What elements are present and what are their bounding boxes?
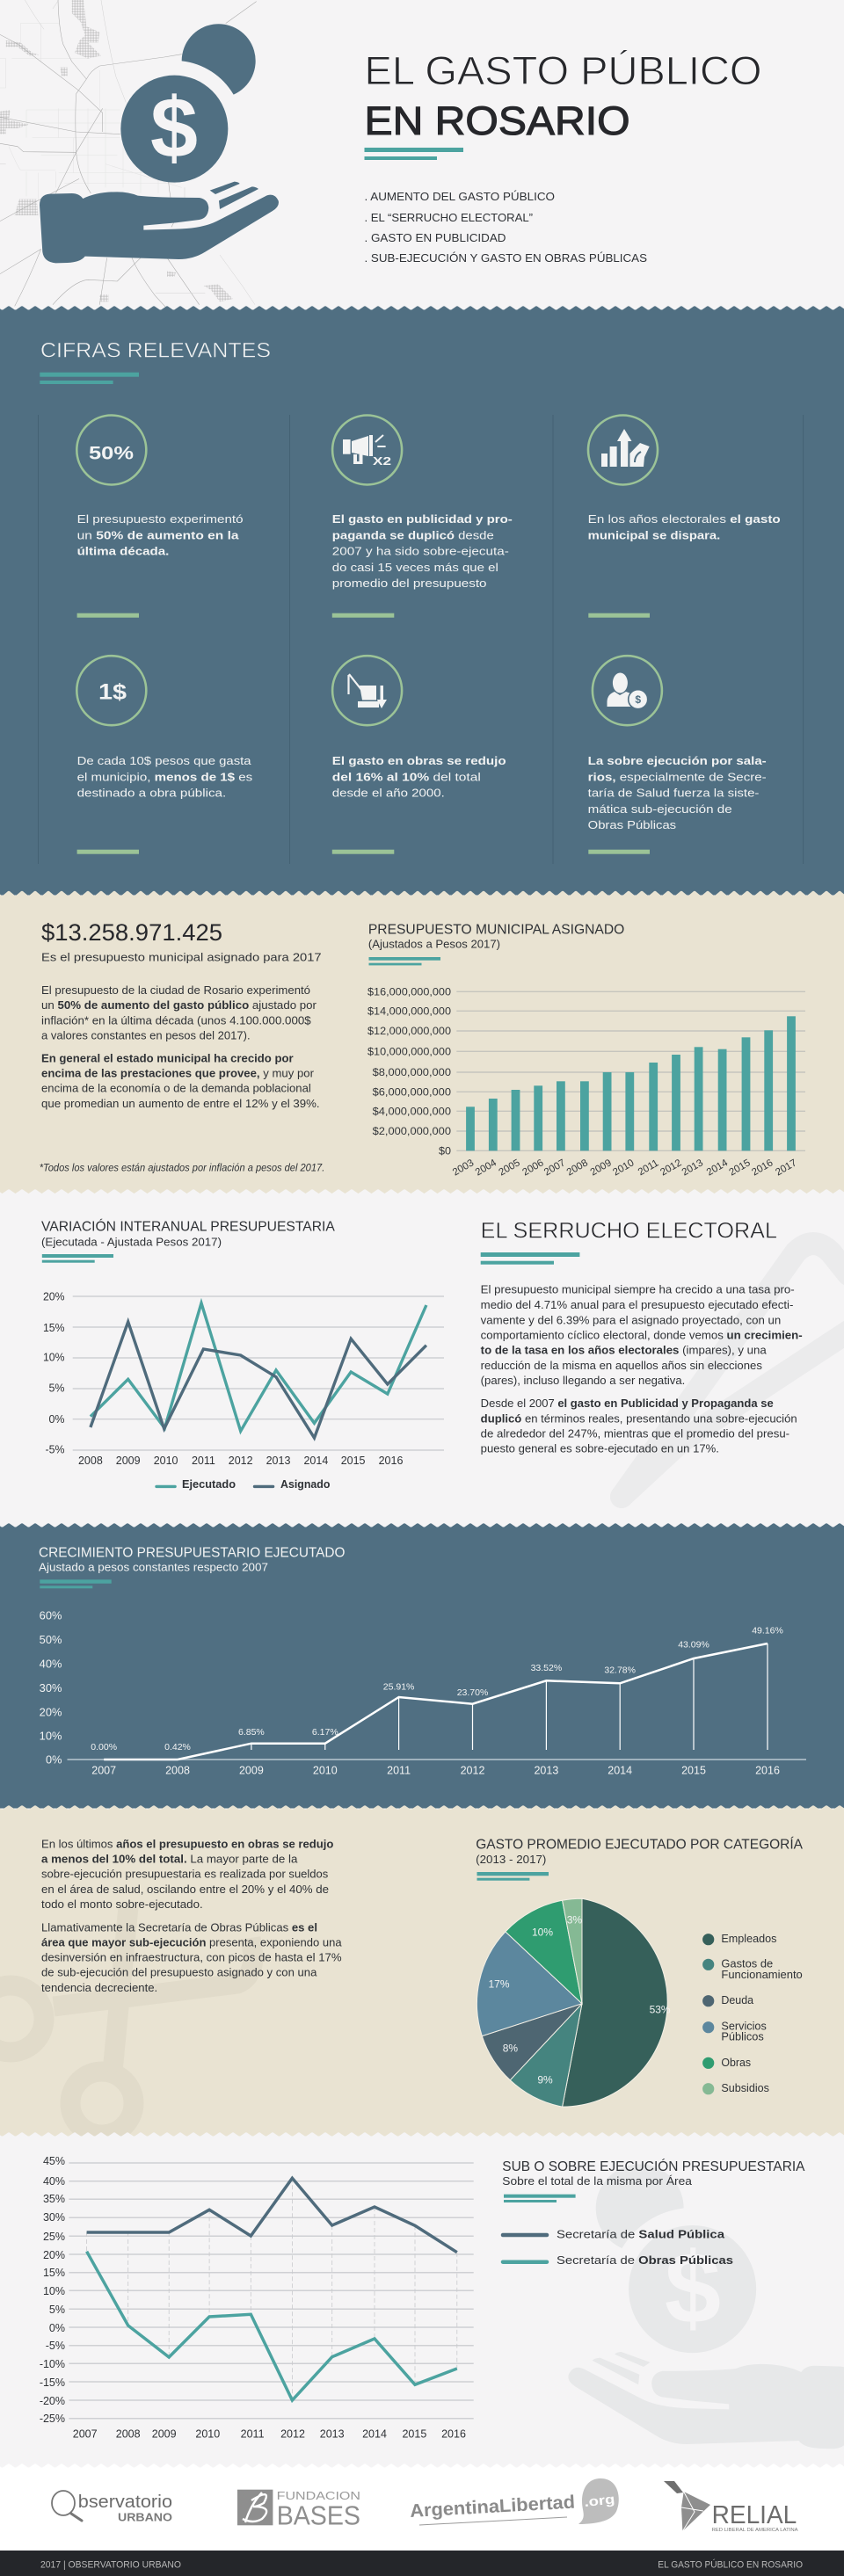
card: public works [332, 656, 506, 854]
big number caption: Es el presupuesto municipal asignado para 2017 [41, 950, 322, 963]
line chart: sub o sobre ejecución: 2013 [320, 2427, 345, 2440]
bar chart: presupuesto municipal: 2007 [542, 1157, 567, 1178]
line chart: sub o sobre ejecución: 20% [43, 2249, 65, 2261]
legend: gasto por categoría [702, 1933, 803, 2094]
icon: dollar sign: $ [150, 80, 198, 176]
line chart: crecimiento: 2007 [91, 1764, 116, 1776]
watermark: scissors [622, 1244, 844, 1497]
text block: obras: en el área de salud, oscilando entre el 20% y el 40% de [41, 1883, 329, 1896]
line chart: sub o sobre ejecución: 2008 [116, 2427, 141, 2440]
line chart: crecimiento: 33.52% [531, 1663, 562, 1673]
section: presupuesto asignado background [0, 896, 844, 1194]
bar chart: presupuesto municipal: 2016 [750, 1157, 775, 1178]
bar chart: presupuesto municipal: 2013 [680, 1157, 705, 1178]
text block: serrucho electoral: vamente y del 6.39% para el asignado proyectado, con un [481, 1313, 781, 1326]
line chart: variación interanual: -5% [46, 1443, 65, 1455]
topics list: . EL “SERRUCHO ELECTORAL” [364, 212, 533, 224]
card: public works: desde el año 2000. [332, 787, 445, 800]
line chart: crecimiento: 30% [40, 1682, 62, 1694]
watermark: scissors handles [0, 1907, 253, 2135]
watermark: hand with coin: $ [665, 2232, 721, 2345]
bar chart: presupuesto municipal: $10,000,000,000 [367, 1048, 451, 1058]
bar chart: presupuesto municipal: 2008 [565, 1157, 590, 1178]
bar chart: presupuesto municipal: $2,000,000,000 [373, 1127, 451, 1137]
title [364, 48, 761, 143]
text block: serrucho electoral: reducción de la misma en aquellos años sin elecciones [481, 1359, 762, 1372]
card: electoral years [588, 415, 781, 618]
logo: argentina libertad [410, 2478, 619, 2525]
line chart: variación interanual: 2013 [266, 1455, 290, 1467]
text block: obras [41, 1837, 342, 1994]
line chart: variación interanual: 15% [43, 1322, 65, 1334]
budget text block: encima de las prestaciones que provee, y muy por [41, 1067, 315, 1080]
city map background [0, 0, 257, 307]
card: salaries: taría de Salud fuerza la siste- [588, 787, 759, 800]
line chart: crecimiento: 10% [40, 1730, 62, 1742]
card: salaries: rios, especialmente de Secre- [588, 770, 767, 783]
bar chart: presupuesto municipal: 2011 [637, 1157, 660, 1178]
line chart: sub o sobre ejecución: -10% [40, 2358, 65, 2370]
card: one dollar: 1$ [98, 680, 127, 705]
card: 50 percent: El presupuesto experimentó [77, 512, 244, 526]
line chart: sub o sobre ejecución: 30% [43, 2211, 65, 2224]
card: publicity doubled: 2007 y ha sido sobre-ejecuta- [332, 545, 509, 558]
chart heading: sub o sobre ejecución: SUB O SOBRE EJECUCIÓN PRESUPUESTARIA [502, 2159, 805, 2174]
text block: obras: a menos del 10% del total. La mayor parte de la [41, 1853, 298, 1866]
line chart: sub o sobre ejecución: 0% [49, 2322, 65, 2334]
chart heading: sub o sobre ejecución [502, 2159, 805, 2202]
card: publicity doubled: paganda se duplicó desde [332, 528, 494, 541]
chart heading: presupuesto municipal asignado: (Ajustados a Pesos 2017) [368, 938, 500, 950]
line chart: crecimiento: 40% [40, 1658, 62, 1670]
text block: obras: sobre-ejecución presupuestaria es realizada por sueldos [41, 1868, 329, 1881]
line chart: sub o sobre ejecución: 40% [43, 2175, 65, 2188]
text block: obras: Llamativamente la Secretaría de Obras Públicas es el [41, 1920, 317, 1934]
section: cifras relevantes [0, 306, 844, 895]
card: 50 percent: última década. [77, 545, 169, 558]
legend: gasto por categoría: Obras [721, 2057, 751, 2069]
heading: cifras relevantes: CIFRAS RELEVANTES [40, 339, 271, 363]
bar chart: presupuesto municipal: 2006 [520, 1157, 546, 1178]
topics list: . SUB-EJECUCIÓN Y GASTO EN OBRAS PÚBLICAS [364, 251, 647, 265]
line chart: crecimiento: 2008 [165, 1764, 190, 1776]
legend: variación interanual [155, 1478, 331, 1491]
line chart: sub o sobre ejecución: 2014 [362, 2427, 387, 2440]
logo: observatorio urbano: bservatorio [78, 2493, 172, 2512]
line chart: sub o sobre ejecución: 2007 [73, 2427, 98, 2440]
topics list [364, 190, 647, 265]
budget text block: un 50% de aumento del gasto público ajustado por [41, 998, 317, 1012]
bar chart: presupuesto municipal: 2005 [498, 1157, 522, 1178]
footer: 2017 | OBSERVATORIO URBANO [40, 2560, 181, 2571]
line chart: crecimiento: 2016 [755, 1764, 780, 1776]
pie chart: gasto por categoría: 53% [650, 2004, 671, 2016]
line chart: crecimiento: 23.70% [457, 1687, 488, 1698]
legend: gasto por categoría: Públicos [721, 2031, 764, 2043]
card: one dollar: De cada 10$ pesos que gasta [77, 754, 251, 767]
line chart: crecimiento: 0.00% [91, 1742, 117, 1752]
line chart: crecimiento [40, 1610, 806, 1776]
text block: serrucho electoral [481, 1283, 803, 1455]
section: obras background [0, 1809, 844, 2136]
line chart: crecimiento: 0.42% [164, 1742, 191, 1752]
card: electoral years: municipal se dispara. [588, 528, 720, 541]
text block: serrucho electoral: comportamiento cíclico electoral, donde vemos un crecimien- [481, 1328, 803, 1341]
line chart: variación interanual: 2011 [192, 1455, 215, 1467]
chart heading: crecimiento [39, 1546, 345, 1588]
logo: observatorio urbano: URBANO [118, 2510, 172, 2523]
bar chart: presupuesto municipal: 2004 [474, 1157, 498, 1178]
card: 50 percent: 50% [89, 444, 134, 464]
line chart: crecimiento: 2015 [681, 1764, 706, 1776]
text block: obras: desinversión en infraestructura, con picos de hasta el 17% [41, 1951, 342, 1964]
bar chart: presupuesto municipal: 2015 [728, 1157, 753, 1178]
title: EL GASTO PÚBLICO [364, 48, 761, 93]
chart heading: gasto promedio: GASTO PROMEDIO EJECUTADO POR CATEGORÍA [476, 1837, 804, 1852]
line chart: sub o sobre ejecución [40, 2155, 474, 2440]
text block: serrucho electoral: medio del 4.71% anual para el presupuesto ejecutado efecti- [481, 1298, 793, 1311]
text block: serrucho electoral: puesto general es sobre-ejecutado en un 17%. [481, 1442, 719, 1455]
watermark: hand with coin [568, 2164, 844, 2449]
budget text block: que promedian un aumento de entre el 12% y el 39%. [41, 1097, 320, 1110]
section: serrucho background [0, 1194, 844, 1527]
legend: gasto por categoría: Subsidios [721, 2082, 769, 2094]
text block: obras: todo el monto sobre-ejecutado. [41, 1898, 203, 1911]
line chart: sub o sobre ejecución: 2010 [195, 2427, 220, 2440]
pie chart: gasto por categoría: 9% [537, 2074, 553, 2086]
heading: el serrucho electoral: EL SERRUCHO ELECTORAL [481, 1218, 777, 1243]
text block: obras: área que mayor sub-ejecución presenta, exponiendo una [41, 1935, 342, 1948]
chart heading: sub o sobre ejecución: Sobre el total de la misma por Área [502, 2174, 692, 2188]
budget text block [41, 983, 320, 1110]
line chart: crecimiento: 6.17% [312, 1727, 338, 1738]
card: publicity doubled: El gasto en publicidad y pro- [332, 512, 513, 526]
line chart: variación interanual: 2016 [379, 1455, 403, 1467]
chart heading: crecimiento: Ajustado a pesos constantes respecto 2007 [39, 1561, 268, 1573]
bar chart: presupuesto municipal: $8,000,000,000 [373, 1068, 451, 1078]
logo: relial: RELIAL [712, 2501, 797, 2529]
legend: secretarías: Secretaría de Obras Públicas [557, 2253, 733, 2267]
section: crecimiento presupuestario [0, 1523, 844, 1809]
line chart: variación interanual: 5% [49, 1382, 65, 1394]
chart heading: variación interanual: VARIACIÓN INTERANUAL PRESUPUESTARIA [41, 1220, 335, 1235]
bar chart: presupuesto municipal: $0 [439, 1146, 451, 1157]
section: logos background [0, 2468, 844, 2551]
line chart: variación interanual: 0% [49, 1413, 65, 1426]
card: publicity doubled: promedio del presupuesto [332, 577, 487, 590]
text block: obras: de sub-ejecución del presupuesto asignado y con una [41, 1966, 317, 1979]
card: 50 percent: un 50% de aumento en la [77, 528, 240, 541]
budget text block: a valores constantes en pesos del 2017). [41, 1028, 251, 1041]
line chart: variación interanual: 2008 [78, 1455, 103, 1467]
logo: fundación bases: BASES [277, 2500, 360, 2531]
card: salaries: $ [635, 693, 641, 706]
chart heading: crecimiento: CRECIMIENTO PRESUPUESTARIO EJECUTADO [39, 1546, 345, 1561]
bar chart: presupuesto municipal: $14,000,000,000 [367, 1007, 451, 1018]
text block: obras: En los últimos años el presupuesto en obras se redujo [41, 1837, 333, 1850]
card: public works: El gasto en obras se redujo [332, 754, 506, 767]
logo: fundación bases [237, 2489, 360, 2531]
logo: argentina libertad: ArgentinaLibertad [410, 2493, 576, 2522]
bar chart: presupuesto municipal: 2014 [705, 1157, 731, 1178]
pie chart: gasto por categoría: 8% [503, 2043, 518, 2055]
bar chart: presupuesto municipal: $16,000,000,000 [367, 988, 451, 998]
legend: variación interanual: Ejecutado [182, 1478, 236, 1491]
line chart: crecimiento: 50% [40, 1634, 62, 1646]
title underline bars [364, 148, 463, 160]
line chart: variación interanual: 2012 [229, 1455, 253, 1467]
line chart: sub o sobre ejecución: 5% [49, 2304, 65, 2316]
chart heading: gasto promedio: (2013 - 2017) [476, 1854, 546, 1866]
budget text block: En general el estado municipal ha crecido por [41, 1051, 294, 1064]
logo: observatorio urbano [52, 2491, 172, 2523]
line chart: sub o sobre ejecución: -5% [46, 2340, 65, 2352]
title: EN ROSARIO [364, 98, 629, 143]
card: salaries: La sobre ejecución por sala- [588, 754, 767, 767]
card: publicity doubled [332, 415, 513, 618]
bar chart: presupuesto municipal: $4,000,000,000 [373, 1107, 451, 1118]
line chart: crecimiento: 2012 [461, 1764, 484, 1776]
topics list: . AUMENTO DEL GASTO PÚBLICO [364, 190, 555, 203]
legend: gasto por categoría: Gastos de [721, 1958, 773, 1970]
text block: serrucho electoral: (pares), incluso llegando a ser negativa. [481, 1374, 685, 1387]
bar chart: presupuesto municipal: 2010 [611, 1157, 636, 1178]
pie chart: gasto por categoría: 10% [532, 1926, 553, 1938]
line chart: variación interanual: 2014 [303, 1455, 328, 1467]
pie chart: gasto por categoría: 3% [567, 1913, 582, 1926]
line chart: crecimiento: 6.85% [238, 1727, 265, 1738]
budget text block: El presupuesto de la ciudad de Rosario experimentó [41, 983, 310, 997]
big number: $13.258.971.425 [41, 919, 222, 946]
chart heading: gasto promedio [476, 1837, 804, 1881]
line chart: crecimiento: 0% [46, 1754, 62, 1767]
line chart: sub o sobre ejecución: 10% [43, 2285, 65, 2297]
line chart: sub o sobre ejecución: 45% [43, 2155, 65, 2167]
bar chart: presupuesto municipal: $12,000,000,000 [367, 1027, 451, 1037]
text block: serrucho electoral: duplicó en términos reales, presentando una sobre-ejecución [481, 1411, 797, 1425]
line chart: crecimiento: 2009 [239, 1764, 264, 1776]
line chart: sub o sobre ejecución: 2009 [152, 2427, 177, 2440]
line chart: crecimiento: 60% [40, 1610, 62, 1622]
card: one dollar [76, 656, 253, 854]
footer: EL GASTO PÚBLICO EN ROSARIO [658, 2559, 803, 2571]
line chart: variación interanual: 2010 [154, 1455, 178, 1467]
line chart: variación interanual: 20% [43, 1290, 65, 1303]
line chart: crecimiento: 25.91% [383, 1681, 414, 1692]
chart heading: presupuesto municipal asignado: PRESUPUESTO MUNICIPAL ASIGNADO [368, 922, 624, 937]
line chart: sub o sobre ejecución: 35% [43, 2193, 65, 2205]
card: publicity doubled: X2 [373, 454, 391, 468]
line chart: crecimiento: 20% [40, 1706, 62, 1718]
legend: gasto por categoría: Funcionamiento [721, 1969, 803, 1981]
card: 50 percent [76, 415, 244, 618]
bar chart: presupuesto municipal: 2009 [589, 1157, 614, 1178]
logo: relial [664, 2481, 798, 2533]
text block: serrucho electoral: de alrededor del 247%, mientras que el promedio del presu- [481, 1427, 789, 1440]
card: salaries [588, 656, 767, 854]
footer [0, 2551, 844, 2576]
legend: variación interanual: Asignado [280, 1478, 331, 1491]
heading bars [40, 373, 139, 384]
legend: gasto por categoría: Deuda [721, 1994, 753, 2006]
section: header background [0, 0, 844, 309]
line chart: sub o sobre ejecución: -15% [40, 2376, 65, 2389]
line chart: crecimiento: 49.16% [752, 1626, 783, 1636]
legend: gasto por categoría: Servicios [721, 2020, 767, 2032]
chart heading: variación interanual [41, 1220, 335, 1263]
topics list: . GASTO EN PUBLICIDAD [364, 232, 506, 244]
line chart: sub o sobre ejecución: 15% [43, 2267, 65, 2279]
logo: argentina libertad: .org [584, 2492, 615, 2510]
budget text block: encima de la economía o de la demanda poblacional [41, 1082, 311, 1095]
legend: secretarías: Secretaría de Salud Pública [557, 2228, 725, 2241]
line chart: variación interanual: 2015 [341, 1455, 366, 1467]
line chart: variación interanual: 2009 [116, 1455, 141, 1467]
line chart: crecimiento: 43.09% [678, 1639, 709, 1650]
line chart: crecimiento: 2010 [313, 1764, 338, 1776]
card: one dollar: el municipio, menos de 1$ es [77, 770, 253, 783]
line chart: crecimiento: 2011 [387, 1764, 411, 1776]
card: publicity doubled: do casi 15 veces más que el [332, 561, 498, 574]
legend: secretarías [503, 2228, 733, 2267]
line chart: sub o sobre ejecución: 2012 [280, 2427, 305, 2440]
bar chart: presupuesto municipal: 2003 [451, 1157, 476, 1178]
line chart: crecimiento: 32.78% [604, 1665, 636, 1675]
line chart: sub o sobre ejecución: -25% [40, 2413, 65, 2425]
icon: hand with coins [40, 24, 279, 263]
bar chart: presupuesto municipal: 2012 [658, 1157, 683, 1178]
bar chart: presupuesto municipal: 2017 [774, 1157, 798, 1178]
card: electoral years: En los años electorales el gasto [588, 512, 781, 526]
text block: obras: tendencia decreciente. [41, 1981, 157, 1994]
section: sub o sobre ejecución background [0, 2136, 844, 2468]
pie chart: gasto por categoría: 17% [488, 1978, 510, 1991]
line chart: crecimiento: 2014 [608, 1764, 632, 1776]
logo: relial: RED LIBERAL DE AMERICA LATINA [712, 2528, 798, 2533]
pie chart: gasto por categoría [477, 1898, 671, 2107]
line chart: crecimiento: 2013 [534, 1764, 558, 1776]
card: salaries: Obras Públicas [588, 818, 677, 831]
bar chart: presupuesto municipal: $6,000,000,000 [373, 1088, 451, 1099]
budget text block: inflación* en la última década (unos 4.100.000.000$ [41, 1013, 311, 1027]
text block: serrucho electoral: Desde el 2007 el gasto en Publicidad y Propaganda se [481, 1397, 774, 1410]
card: salaries: mática sub-ejecución de [588, 802, 732, 816]
bar chart: presupuesto municipal [367, 988, 805, 1178]
card: public works: del 16% al 10% del total [332, 770, 481, 783]
line chart: variación interanual: 10% [43, 1352, 65, 1364]
line chart: variación interanual [43, 1290, 444, 1467]
legend: gasto por categoría: Empleados [721, 1933, 776, 1945]
logo: fundación bases: FUNDACION [277, 2489, 360, 2502]
line chart: sub o sobre ejecución: -20% [40, 2395, 65, 2407]
chart heading: presupuesto municipal asignado [368, 922, 624, 965]
line chart: sub o sobre ejecución: 2016 [441, 2427, 466, 2440]
line chart: sub o sobre ejecución: 2015 [402, 2427, 426, 2440]
footnote: *Todos los valores están ajustados por inflación a pesos del 2017. [40, 1163, 324, 1173]
text block: serrucho electoral: El presupuesto municipal siempre ha crecido a una tasa pro- [481, 1283, 795, 1296]
text block: serrucho electoral: to de la tasa en los años electorales (impares), y una [481, 1344, 767, 1357]
line chart: sub o sobre ejecución: 25% [43, 2231, 65, 2243]
chart heading: variación interanual: (Ejecutada - Ajustada Pesos 2017) [41, 1236, 222, 1248]
line chart: sub o sobre ejecución: 2011 [241, 2427, 265, 2440]
heading: el serrucho electoral [481, 1218, 777, 1265]
card: one dollar: destinado a obra pública. [77, 787, 226, 800]
